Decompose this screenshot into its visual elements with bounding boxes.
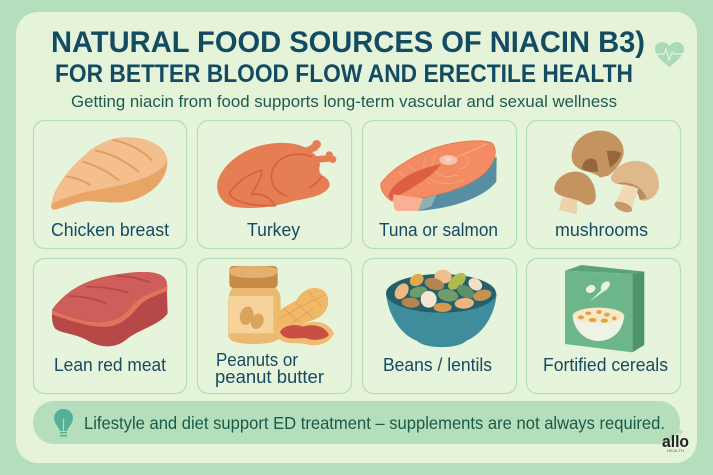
icon: chicken breast <box>51 137 167 210</box>
logo: allo health: allo <box>662 432 689 451</box>
icon: salmon steak <box>381 141 497 211</box>
icon: bowl of beans <box>386 270 497 347</box>
card: turkey <box>198 120 352 248</box>
title <box>51 26 645 88</box>
label <box>215 350 324 387</box>
card: fortified cereals <box>526 258 680 394</box>
label: Beans / lentils <box>383 355 492 375</box>
icon: peanut butter jar and peanuts <box>228 266 334 345</box>
callout banner <box>33 401 680 444</box>
label: Turkey <box>247 220 300 240</box>
card: chicken breast <box>34 120 186 248</box>
card: lean red meat <box>34 258 186 394</box>
label: Chicken breast <box>51 220 169 240</box>
icon: mushrooms <box>554 131 659 215</box>
icon: red meat steak <box>52 272 168 346</box>
icon: cereal box <box>565 265 644 352</box>
logo: allo health: HEALTH <box>667 449 685 453</box>
label: peanut butter <box>215 367 324 387</box>
icon: heart with pulse <box>655 42 684 67</box>
icon: roast turkey <box>217 140 336 208</box>
card: beans / lentils <box>362 258 516 394</box>
label: Lean red meat <box>54 355 166 375</box>
icon: light bulb <box>54 409 73 436</box>
label: Fortified cereals <box>543 355 668 375</box>
subtitle: Getting niacin from food supports long-term vascular and sexual wellness <box>71 92 617 111</box>
card: peanuts or peanut butter <box>198 258 352 394</box>
title: NATURAL FOOD SOURCES OF NIACIN B3) <box>51 26 645 59</box>
label: Tuna or salmon <box>379 220 498 240</box>
title: FOR BETTER BLOOD FLOW AND ERECTILE HEALTH <box>55 60 633 88</box>
label: mushrooms <box>555 220 648 240</box>
card: mushrooms <box>526 120 680 248</box>
callout text: Lifestyle and diet support ED treatment – supplements are not always required. <box>84 413 665 433</box>
card: tuna or salmon <box>362 120 516 248</box>
label: Peanuts or <box>216 350 298 370</box>
